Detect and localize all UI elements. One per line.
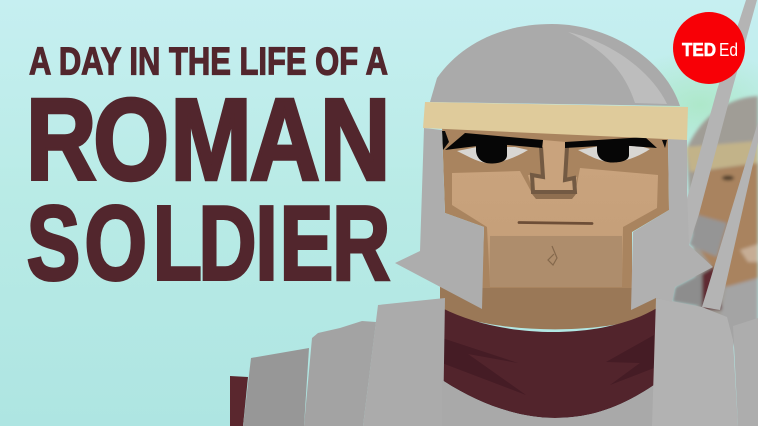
title line 3: SOLDIER xyxy=(27,184,390,302)
left eye xyxy=(442,131,543,164)
chin mark xyxy=(548,246,557,265)
helmet dome xyxy=(430,24,680,106)
TED-Ed logo: Ed xyxy=(719,40,738,60)
background soldier xyxy=(672,96,758,345)
armour xyxy=(230,298,758,426)
nose xyxy=(532,147,575,192)
right cheek guard xyxy=(631,138,713,310)
mouth xyxy=(519,222,592,224)
left cheek guard xyxy=(395,128,484,309)
TED-Ed logo xyxy=(673,12,745,84)
title xyxy=(26,40,390,302)
right eye xyxy=(565,137,667,162)
TED-Ed logo: TED xyxy=(682,40,716,60)
helmet highlight xyxy=(568,32,667,104)
scarf xyxy=(442,308,657,418)
soldier xyxy=(230,24,758,426)
helmet band xyxy=(423,102,688,140)
neck xyxy=(440,285,660,329)
spears xyxy=(684,0,758,310)
title line 1: A DAY IN THE LIFE OF A xyxy=(29,40,388,84)
title line 2: ROMAN xyxy=(26,74,390,204)
face xyxy=(442,128,669,288)
